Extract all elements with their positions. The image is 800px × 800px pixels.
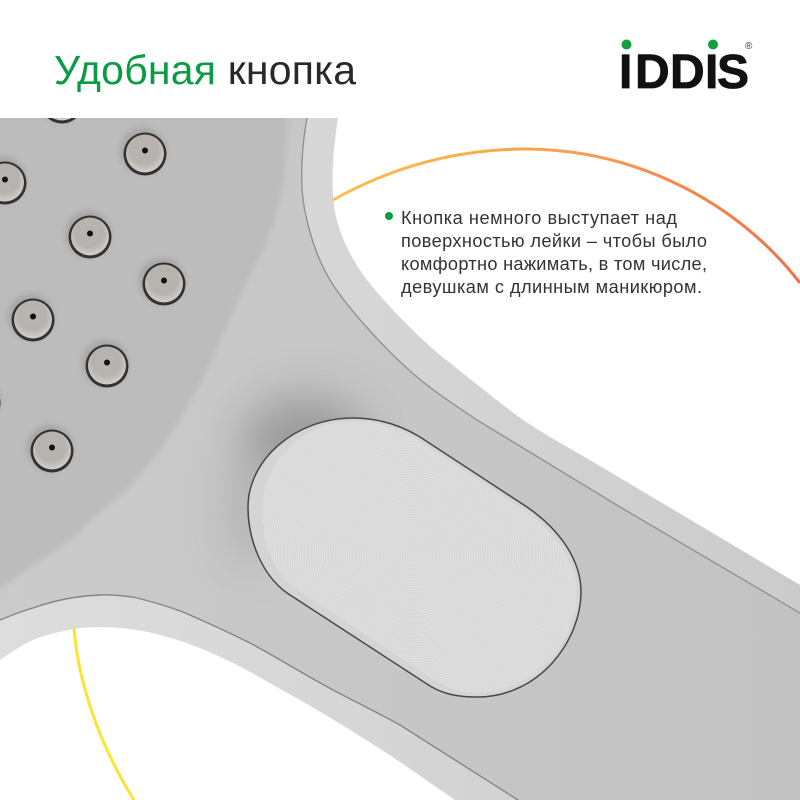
head face <box>0 118 287 588</box>
text block: поверхностью лейки – чтобы было <box>401 231 707 251</box>
logo: IDDIS: IDDIS <box>619 46 749 99</box>
arc: yellow <box>74 628 134 800</box>
logo: IDDIS: ® <box>745 41 753 52</box>
text block <box>401 208 707 297</box>
arc: orange <box>333 149 800 283</box>
text block: комфортно нажимать, в том числе, <box>401 254 707 274</box>
title: Удобная кнопка <box>54 47 356 93</box>
button <box>248 418 581 697</box>
shadow around button <box>230 398 367 565</box>
nozzles <box>0 118 186 472</box>
text block: девушкам с длинным маникюром. <box>401 277 702 297</box>
bullet <box>385 212 393 220</box>
rim grooves <box>0 595 518 800</box>
text block: Кнопка немного выступает над <box>401 208 677 228</box>
